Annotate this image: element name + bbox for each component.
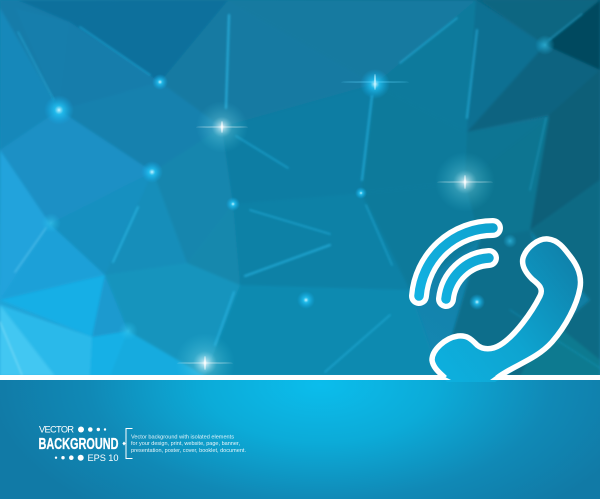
description text xyxy=(131,434,246,454)
white divider line right xyxy=(490,375,600,380)
light streaks xyxy=(0,14,600,375)
bottom dots xyxy=(55,455,84,461)
bracket xyxy=(122,428,132,458)
white divider line xyxy=(0,375,451,380)
description text: presentation, poster, cover, booklet, document. xyxy=(131,448,246,454)
top dots xyxy=(78,426,106,432)
glowing flares xyxy=(41,35,555,393)
BACKGROUND label: BACKGROUND xyxy=(38,436,118,453)
VECTOR label: VECTOR xyxy=(39,424,74,434)
description text: Vector background with isolated elements xyxy=(131,434,234,440)
EPS 10 label: EPS 10 xyxy=(88,453,118,463)
handset outline xyxy=(432,239,581,378)
polygon background xyxy=(0,0,600,376)
icon: phone handset xyxy=(432,239,581,382)
handset fill xyxy=(432,239,581,382)
icon: signal arcs xyxy=(419,228,493,299)
description text: for your design, print, website, page, banner, xyxy=(131,441,240,447)
brand block xyxy=(38,424,118,463)
bottom band xyxy=(0,376,600,499)
